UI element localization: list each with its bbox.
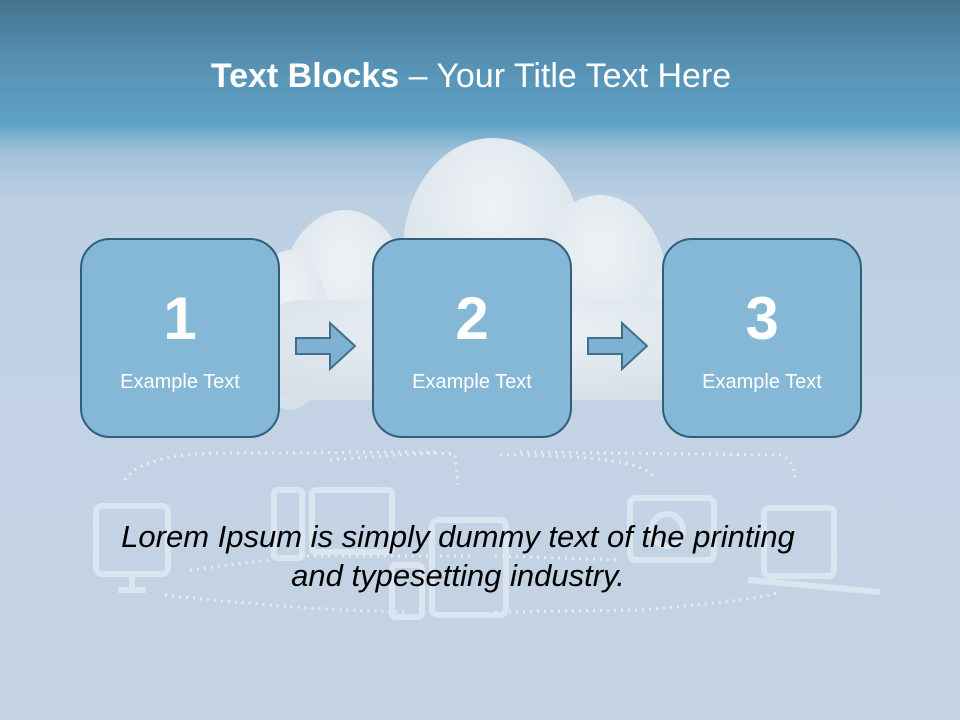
title: Text Blocks – Your Title Text Here [211, 57, 731, 95]
panel: block 1 [80, 238, 280, 438]
body text [121, 519, 795, 593]
body text: and typesetting industry. [291, 558, 625, 593]
panel: block 3: Example Text [702, 371, 822, 393]
panel: block 3 [662, 238, 862, 438]
panel: block 2 [372, 238, 572, 438]
body text: Lorem Ipsum is simply dummy text of the printing [121, 519, 795, 554]
panel: block 2: Example Text [412, 371, 532, 393]
arrow 1 [295, 320, 356, 372]
panel: block 3: 3 [745, 285, 779, 352]
panel: block 2: 2 [455, 285, 489, 352]
panel: block 1: 1 [163, 285, 197, 352]
panel: block 1: Example Text [120, 371, 240, 393]
arrow 2 [587, 320, 648, 372]
